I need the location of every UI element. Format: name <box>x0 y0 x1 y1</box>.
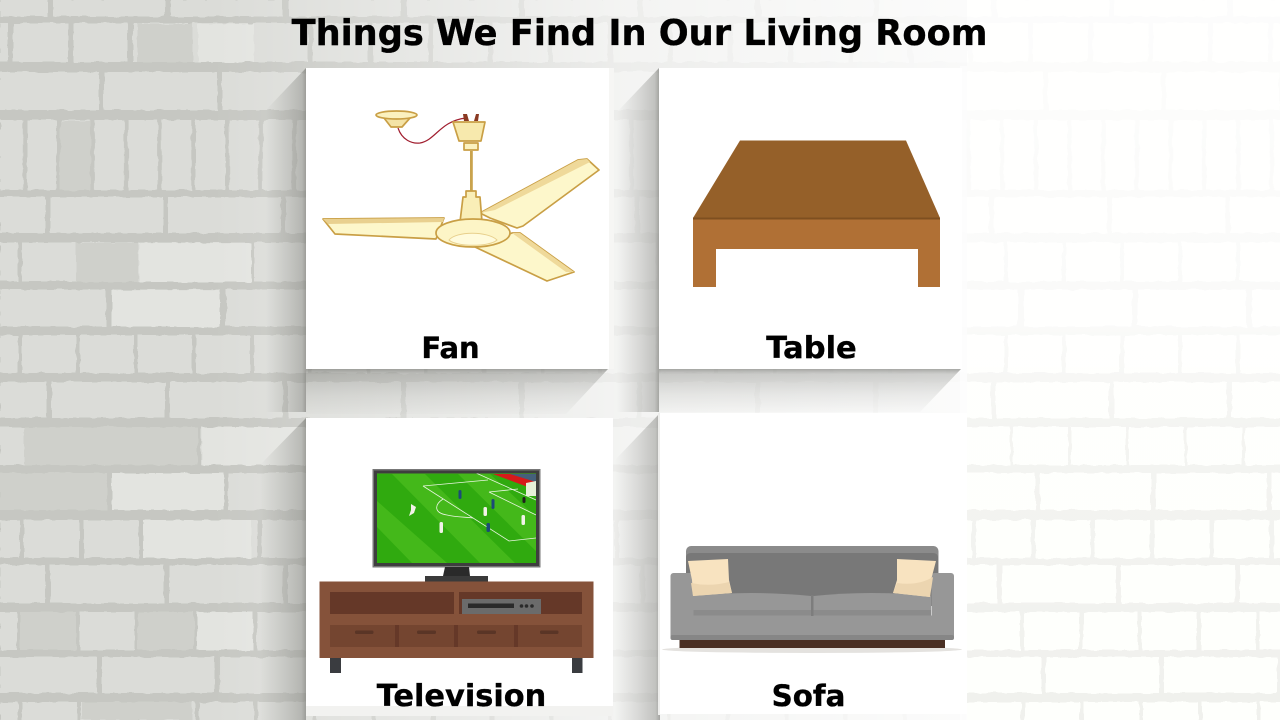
panel: television <box>306 418 613 716</box>
icon: television on cabinet <box>320 469 594 673</box>
icon: sofa <box>662 546 962 653</box>
panel: sofa <box>658 413 967 715</box>
panel: fan <box>306 68 614 369</box>
label: fan: Fan <box>421 331 480 365</box>
icon: left pillow <box>688 559 732 596</box>
label: television: Television <box>377 679 546 714</box>
label: table: Table <box>766 331 857 366</box>
label: sofa: Sofa <box>772 679 845 713</box>
icon: ceiling fan <box>323 111 599 281</box>
title: Things We Find In Our Living Room <box>292 13 987 54</box>
panel: table <box>659 68 962 369</box>
card shadows <box>260 68 961 720</box>
icon: table <box>693 140 940 287</box>
icon: right pillow <box>893 559 936 597</box>
